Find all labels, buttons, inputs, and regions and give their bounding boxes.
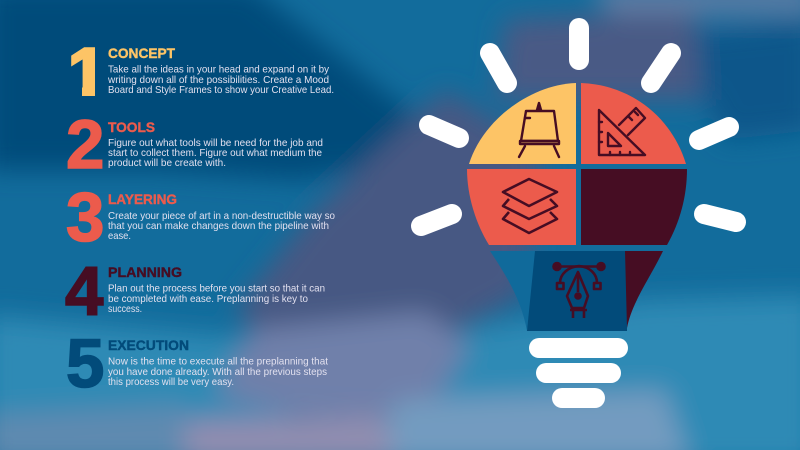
text: layering description: that you can make changes down the pipeline with [108, 221, 329, 232]
text: concept description: writing down all of the possibilities. Create a Mood [107, 75, 329, 86]
number 2: 2 [66, 106, 104, 183]
text: concept description [107, 64, 334, 96]
heading: concept: CONCEPT [108, 45, 175, 61]
icon: easel [519, 103, 559, 157]
quadrant: dark maroon [581, 169, 687, 245]
bulb neck, left [490, 251, 536, 331]
text: layering description: ease. [108, 231, 131, 242]
text: layering description: Create your piece of art in a non-destructible way so [108, 211, 335, 222]
heading: layering: LAYERING [108, 191, 177, 207]
icon: stacked layers [503, 179, 557, 233]
text: execution description: you have done already. With all the previous steps [108, 367, 327, 378]
text: planning description [108, 284, 325, 315]
icon: pen tool [554, 263, 604, 318]
text: tools description: Figure out what tools will be need for the job and [108, 138, 323, 149]
heading: tools: TOOLS [108, 119, 155, 135]
text: tools description: start to collect them. Figure out what medium the [108, 148, 322, 159]
quadrant: ruler, coral [581, 83, 686, 164]
quadrant: layers, coral [467, 169, 576, 245]
number 5: 5 [66, 325, 104, 402]
text: planning description: success. [108, 304, 142, 315]
step 3: layering [66, 178, 335, 256]
text: concept description: Take all the ideas in your head and expand on it by [108, 64, 330, 76]
heading: execution: EXECUTION [108, 337, 189, 353]
text: planning description: be completed with ease. Preplanning is key to [108, 294, 308, 305]
number 1: 1 [68, 34, 106, 111]
step 5: execution [66, 325, 328, 402]
bulb neck, maroon [625, 251, 663, 328]
text: execution description: Now is the time to execute all the preplanning that [108, 356, 328, 368]
text: tools description [108, 138, 323, 169]
bulb base bars [529, 338, 628, 408]
bulb neck, dark blue [527, 251, 628, 331]
text: layering description [108, 211, 335, 242]
bulb rays [421, 28, 736, 226]
step 1: concept [71, 47, 334, 96]
text: planning description: Plan out the process before you start so that it can [108, 284, 325, 294]
text: execution description [108, 356, 328, 388]
text: concept description: Board and Style Frames to show your Creative Lead. [108, 85, 334, 96]
light bulb [421, 28, 736, 408]
number 4: 4 [65, 252, 103, 330]
step 2: tools [66, 106, 323, 183]
text: execution description: this process will be very easy. [108, 377, 234, 388]
icon: set square and ruler [599, 108, 645, 155]
text: tools description: product will be create with. [108, 158, 226, 169]
heading: planning: PLANNING [108, 264, 182, 280]
step 4: planning [65, 252, 325, 330]
quadrant: easel, yellow [469, 83, 576, 164]
number 3: 3 [66, 178, 104, 256]
